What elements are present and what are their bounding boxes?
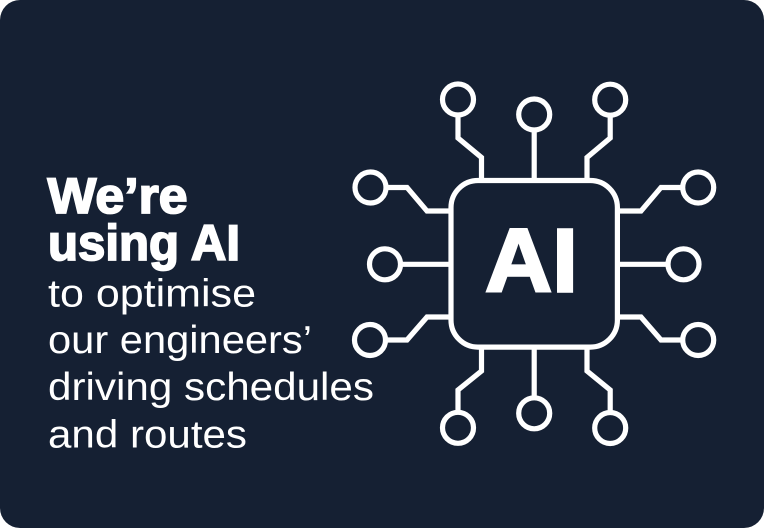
body text: driving schedules bbox=[48, 366, 374, 409]
heading: We're using AI: using AI bbox=[48, 215, 240, 271]
text block: headline bbox=[48, 168, 374, 456]
body text: and routes bbox=[48, 414, 247, 456]
bottom circuit traces bbox=[442, 347, 626, 444]
body text bbox=[48, 272, 374, 456]
body text: our engineers’ bbox=[48, 319, 312, 362]
heading: We're using AI: We’re bbox=[48, 168, 188, 224]
heading: We're using AI bbox=[48, 168, 240, 271]
top circuit traces bbox=[442, 84, 626, 180]
chip body bbox=[451, 180, 617, 347]
right circuit traces bbox=[617, 172, 714, 356]
chip label: AI bbox=[485, 212, 578, 312]
icon: AI chip bbox=[354, 84, 714, 444]
body text: to optimise bbox=[48, 272, 256, 316]
left circuit traces bbox=[354, 172, 451, 356]
